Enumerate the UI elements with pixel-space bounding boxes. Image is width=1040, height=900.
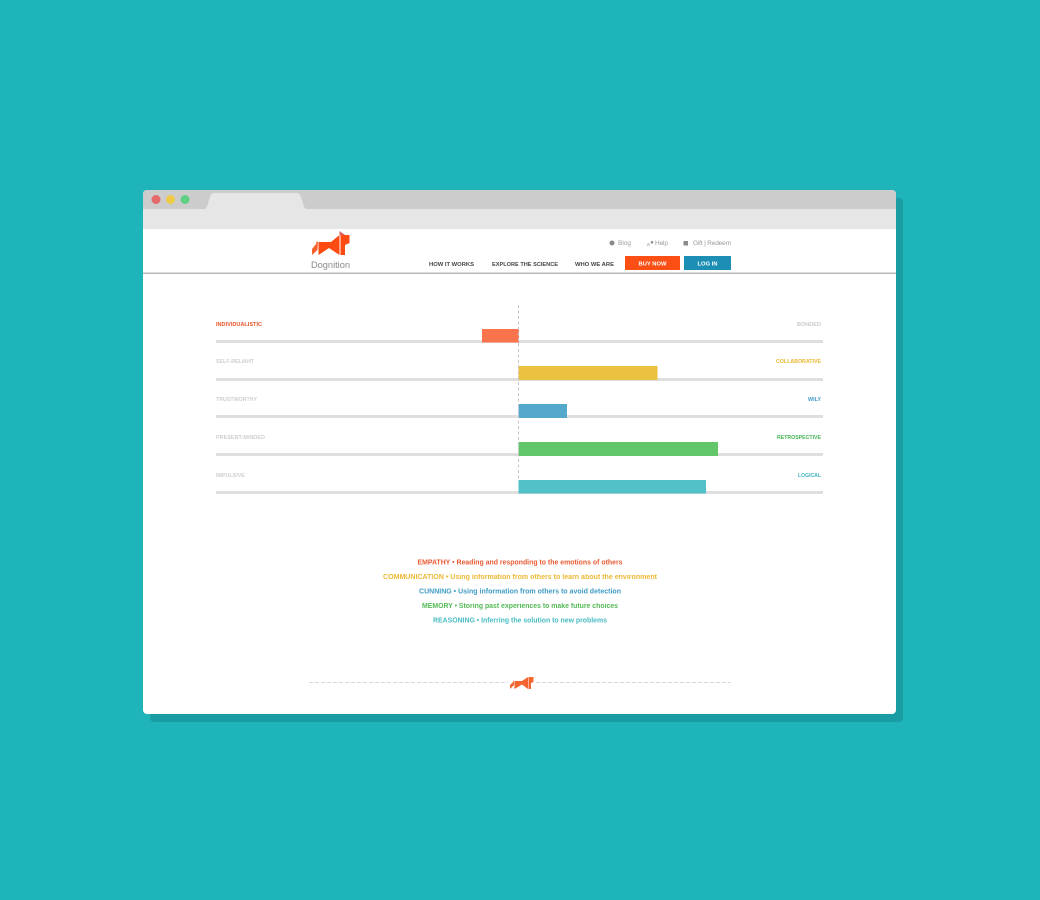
left labels: SELF-RELIANT (216, 359, 255, 365)
legend: communication: COMMUNICATION • Using information from others to learn about the environment (383, 574, 658, 581)
icon: blog (610, 240, 614, 246)
main navigation: WHO WE ARE (575, 262, 614, 268)
right labels: COLLABORATIVE (776, 359, 821, 365)
bar: individualistic (482, 329, 519, 342)
button: buy now (625, 256, 680, 270)
track lines (216, 340, 823, 494)
legend: reasoning: REASONING • Inferring the solution to new problems (433, 618, 607, 624)
right labels (776, 322, 822, 479)
main navigation (429, 262, 614, 268)
browser window (143, 190, 896, 714)
right labels: WILY (808, 397, 821, 403)
button: buy now: BUY NOW (639, 262, 667, 268)
legend: empathy: EMPATHY • Reading and responding to the emotions of others (418, 560, 623, 566)
icon: footer dog logo (510, 677, 534, 689)
legend: memory: MEMORY • Storing past experiences to make future choices (422, 603, 618, 610)
window control: close (152, 195, 160, 204)
chart: personality dimensions (216, 305, 823, 494)
logo wordmark: Dognition (311, 260, 350, 270)
bar: collaborative (518, 366, 658, 380)
legend: cunning: CUNNING • Using information from others to avoid detection (419, 588, 621, 596)
utility links: Gift | Redeem (693, 240, 731, 247)
right labels: BONDED (797, 322, 821, 328)
window control: minimise (166, 195, 175, 204)
button: log in (684, 256, 731, 270)
utility links: Blog (618, 240, 631, 247)
legend: dimension definitions (383, 560, 658, 624)
browser tab bar (143, 190, 896, 209)
main navigation: HOW IT WORKS (429, 262, 474, 268)
left labels: TRUSTWORTHY (216, 397, 257, 403)
right labels: RETROSPECTIVE (777, 435, 821, 441)
left labels (216, 322, 265, 479)
icon: help (647, 241, 653, 246)
utility links: Help (655, 240, 668, 247)
right labels: LOGICAL (798, 473, 822, 479)
site header (143, 229, 896, 274)
utility links (610, 240, 731, 247)
window shadow (150, 198, 903, 722)
left labels: IMPULSIVE (216, 473, 245, 479)
browser tab (205, 193, 306, 209)
bar: logical (518, 480, 706, 494)
icon: gift (684, 241, 688, 246)
logo: Dognition dog (311, 231, 350, 270)
bar: wily (518, 404, 567, 418)
bar: retrospective (518, 442, 718, 456)
left labels: PRESENT-MINDED (216, 435, 265, 441)
browser toolbar (143, 209, 896, 229)
main navigation: EXPLORE THE SCIENCE (492, 262, 558, 268)
button: log in: LOG IN (698, 262, 717, 268)
footer divider with logo (309, 677, 731, 689)
window control: maximise (180, 195, 190, 204)
centre axis (518, 305, 520, 480)
left labels: INDIVIDUALISTIC (216, 322, 262, 328)
